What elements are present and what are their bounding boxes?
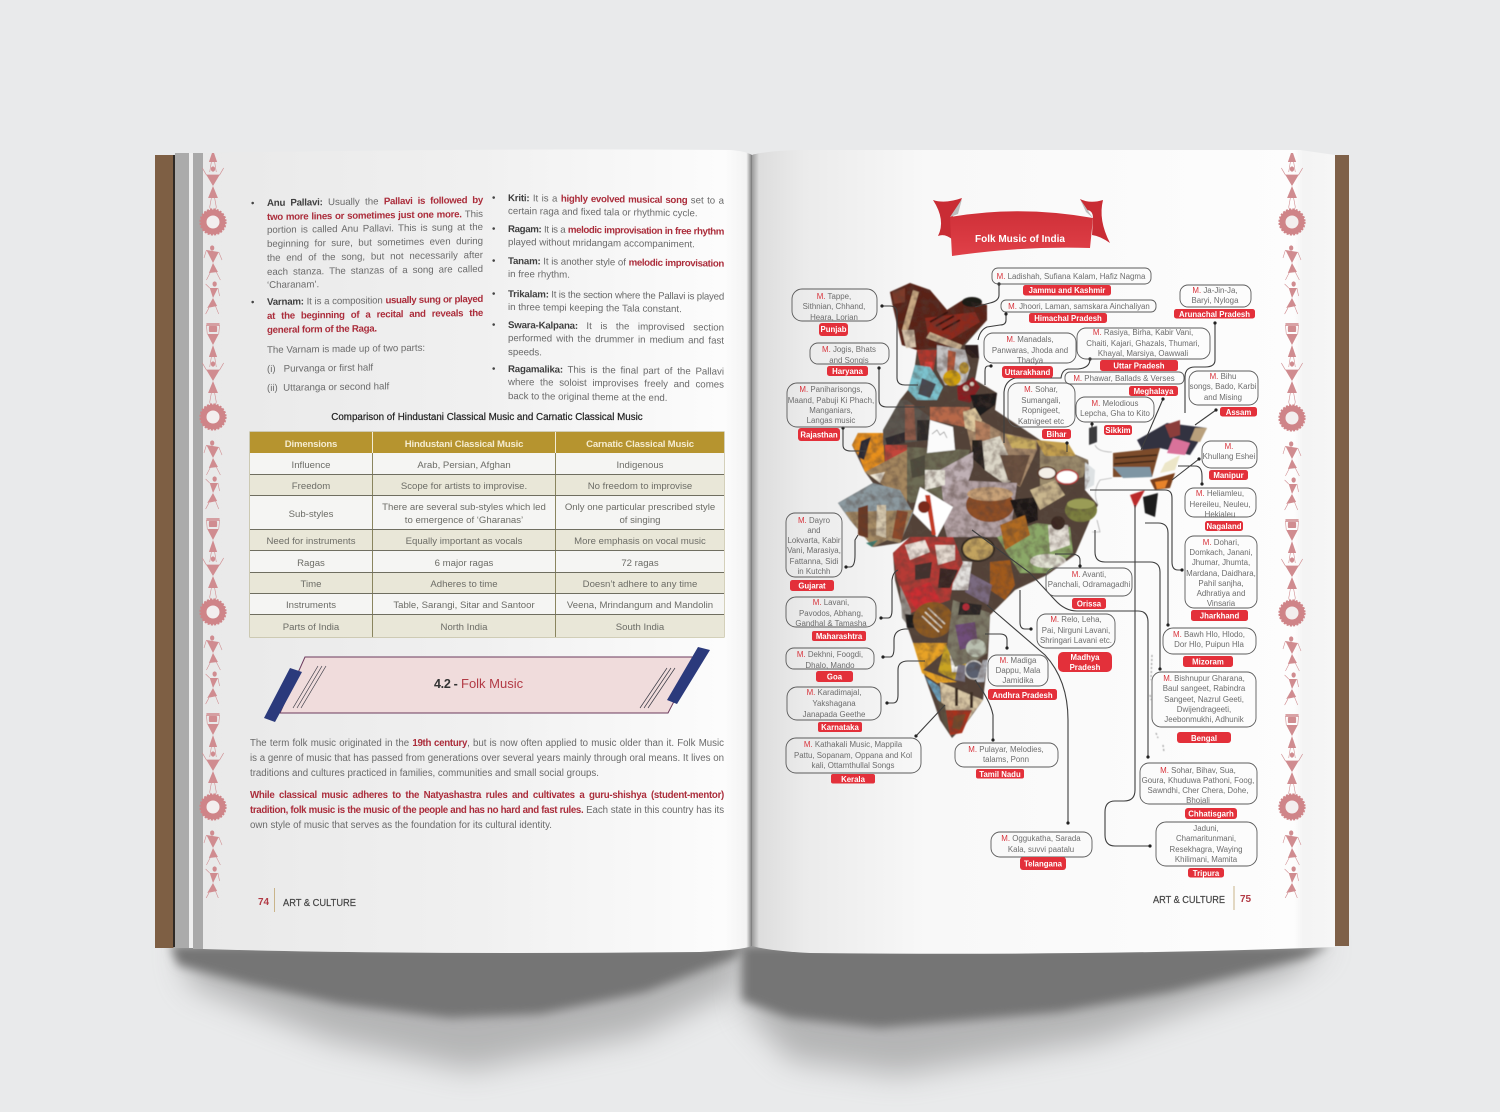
state label: Goa: M. Dekhni, Foogdi, [797,650,863,659]
state label: Nagaland: Hekialeu [1205,510,1235,519]
row: Sub-styles: to emergence of ‘Gharanas’ [405,515,523,526]
state label: Madhya Pradesh: M. Relo, Leha, [1050,615,1102,624]
state label: Bengal [1152,672,1256,743]
state label: Haryana: Haryana [832,367,864,376]
map: gujarat [838,483,913,547]
state label: Uttarakhand: Thadya [1017,356,1044,365]
state label: Haryana: and Songis [829,356,869,365]
section banner: 4.2 Folk Music [264,647,710,722]
map: tamil nadu [940,682,983,735]
row: Sub-styles [250,496,724,530]
state label: Telangana: M. Oggukatha, Sarada [1001,834,1081,843]
state label: Himachal Pradesh: Himachal Pradesh [1034,314,1102,323]
bullet: Tanam: in free rhythm. [508,269,570,281]
state label: Kerala: M. Kathakali Music, Mappila [804,740,903,749]
state label: Nagaland [1185,488,1256,531]
bullet: Anu Pallavi [251,194,484,291]
state label: Tripura: Chamaritunmani, [1176,834,1236,843]
row: Sub-styles: Sub-styles [289,509,333,520]
state label: Meghalaya: Meghalaya [1134,387,1174,396]
row: Influence [250,453,724,475]
right column text [492,193,724,404]
map: telangana and andhra pradesh [947,600,990,682]
state label: Nagaland: Nagaland [1206,522,1242,531]
state label: Sikkim: M. Melodious [1092,399,1139,408]
right footer: ART & CULTURE [1153,895,1225,906]
state label: Kerala: Kerala [841,775,866,784]
state label: Nagaland: M. Heliamleu, [1196,489,1244,498]
map: base silhouette [838,283,1098,738]
state label: Jharkhand: Pahil sanjha, [1198,579,1244,588]
row: Ragas: 72 ragas [621,558,659,569]
left footer: 74 [258,897,270,908]
state label: Bengal: Jeebonmukhi, Adhunik [1164,715,1244,724]
row: Instruments: Instruments [286,600,336,611]
bullet: Tanam: Tanam: It is another style of melodic improvisation [508,256,724,269]
map: himachal pradesh [965,345,979,358]
state label: Sikkim: Lepcha, Gha to Kito [1080,409,1150,418]
row: Influence: Influence [292,460,330,471]
state label: Uttarakhand: Panwaras, Jhoda and [992,346,1068,355]
row: Need for instruments: Equally important as vocals [406,536,522,547]
bullet: Anu Pallavi: portion is called Anu Pallavi. This is sung at the [267,222,483,236]
folk music paragraph one [250,738,724,779]
map: kerala [925,677,950,735]
state label: Gujarat: Gujarat [798,582,826,590]
state label: Maharashtra: Gandhal & Tamasha [795,619,867,628]
row: Time: Time [301,579,321,590]
state label: Gujarat: Fattanna, Sidi [790,557,839,566]
bullet: Varnam: at the beginning of a recital and reveals the [267,308,483,322]
state label: Rajasthan: Manganiars, [809,406,853,415]
state label: Punjab: Punjab [820,325,847,334]
table title: Comparison of Hindustani Classical Music and Carnatic Classical Music [331,412,643,422]
map: maharashtra [893,537,963,628]
state label: Kerala: Pattu, Sopanam, Oppana and Kol [794,751,912,760]
state label: Telangana: Telangana [1024,860,1063,868]
state label: Rajasthan: Maand, Pabuji Ki Phach, [788,396,874,405]
row: Instruments: Table, Sarangi, Sitar and Santoor [393,600,535,611]
left cover edge [155,155,174,948]
state label: Gujarat: and [807,526,821,535]
state label: Tripura: Resekhagra, Waying [1170,845,1242,854]
state label: Tripura: Jaduni, [1193,824,1219,833]
folk music paragraph one: is a genre of music that has passed from generations over several years mainly through oral means. It lives on [250,753,724,764]
left footer [258,888,356,912]
bullet: Swara-Kalpana: Swara-Kalpana: It is the improvised section [508,320,724,333]
state label: Jharkhand: Jharkhand [1200,612,1239,620]
folk music paragraph two: own style of music that serves as the foundation for its cultural identity. [250,820,552,830]
state label: Uttar Pradesh [1077,328,1210,371]
state label: Manipur [1202,441,1257,480]
state label: Jharkhand: Domkach, Janani, [1189,548,1253,557]
right warli border [1278,153,1306,898]
section banner: 4.2 Folk Music: Folk Music [461,676,524,691]
row: Ragas: Ragas [297,558,325,569]
state label: Bihar: Ropnigeet, [1022,406,1060,415]
state label: Haryana [810,343,889,376]
state label: Jharkhand: M. Dohari, [1203,538,1239,547]
table header: Dimensions [285,439,337,450]
text: • [251,297,254,308]
map: photo texture overlay [830,280,1100,740]
text: • [492,224,495,235]
state label: Punjab [792,289,877,336]
open book illustration [155,150,1349,1088]
map: uttar pradesh [930,393,1037,487]
bullet: Tanam [492,256,724,281]
row: Need for instruments [250,530,724,551]
map: chhattisgarh and orissa [950,497,1073,605]
state label: Orissa [1046,568,1132,609]
state label: Tamil Nadu [955,743,1058,779]
state label: Mizoram: Dor Hlo, Puipun Hla [1174,640,1244,649]
varnam parts: (ii) Uttaranga or second half [267,381,389,394]
map: central collage [865,445,973,513]
bullet: Varnam: general form of the Raga. [267,323,377,335]
bullet: Kriti [492,193,724,220]
map: punjab [917,350,937,375]
state label: Himachal Pradesh [1001,300,1156,323]
comparison table [250,432,724,637]
state label: Tamil Nadu: talams, Ponn [983,755,1029,764]
text: • [492,364,495,375]
left column text [251,194,484,394]
folk music paragraph two [250,790,724,830]
row: Parts of India: South India [616,622,664,633]
row: Need for instruments: More emphasis on vocal music [574,536,706,547]
left footer: ART & CULTURE [283,898,356,909]
bullet: Trikalam: in three tempi keeping the Tala constant. [508,302,682,315]
bullet: Swara-Kalpana: speeds. [508,347,542,358]
state label: Tripura: Tripura [1193,869,1220,878]
state label: Bengal: Dwijendrageeti, [1177,705,1231,714]
varnam parts: The Varnam is made up of two parts: [267,342,425,355]
row: Parts of India: North India [441,622,487,633]
state label: Uttar Pradesh: Uttar Pradesh [1113,362,1165,370]
state label: Tripura [1156,822,1257,878]
state label: Gujarat: Lokvarta, Kabir [787,536,841,545]
state label: Arunachal Pradesh [1174,285,1255,319]
map: bengal [1030,440,1095,510]
state label: Bengal: Bengal [1191,734,1217,743]
India map collage [830,280,1207,752]
state label: Assam: songs, Bado, Karbi [1190,382,1257,391]
state label: Orissa: Orissa [1077,600,1102,608]
left page [203,149,752,953]
state label: Sikkim [1076,397,1154,435]
state label: Andhra Pradesh: Jamidika [1002,676,1034,685]
state label: Bihar [1008,383,1075,439]
state label: Assam: M. Bihu [1210,372,1236,381]
row: Ragas: 6 major ragas [435,558,493,569]
state label: Punjab: M. Tappe, [817,292,851,301]
map: thin state outlines [1092,445,1112,532]
bullet: Trikalam: Trikalam: It is the section where the Pallavi is played [508,289,724,302]
folk music paragraph two: While classical music adheres to the Natyashastra rules and cultivates a guru-shishya (student-mentor) [250,790,724,800]
state label: Rajasthan [787,383,876,441]
state label: Assam: Assam [1226,408,1251,417]
left page shadow [170,945,748,1070]
state label: Bengal: Baul sangeet, Rabindra [1163,684,1246,693]
state label: Goa: Dhalo, Mando [805,661,855,670]
text: • [492,320,495,331]
state label: Madhya Pradesh: Pradesh [1070,663,1101,672]
row: Influence: Arab, Persian, Afghan [417,460,511,471]
state label: Orissa: Panchali, Odramagadhi [1048,580,1130,589]
bullet: Kriti: Kriti: It is a highly evolved musical song set to a [508,193,724,207]
bullet: Ragamalika: back to the original theme at the end. [508,391,667,404]
state label: Rajasthan: Langas music [807,416,855,425]
state label: Mizoram: M. Bawh Hlo, Hlodo, [1173,630,1245,639]
state label: Andhra Pradesh: Andhra Pradesh [992,691,1053,700]
state label: Andhra Pradesh: Dappu, Mala [996,666,1041,675]
state label: Karnataka: M. Karadimajal, [807,688,861,697]
state label: Uttarakhand: Uttarakhand [1005,368,1050,377]
state label: Chhatisgarh: Sawndhi, Cher Chera, Dohe, [1148,786,1248,795]
state label: Telangana: Kala, suvvi paatalu [1008,845,1074,854]
state label: Chhatisgarh [1140,763,1257,819]
ribbon title: Folk Music of India: Folk Music of India [975,234,1065,245]
bullet: Ragam [492,224,724,251]
state label: Gujarat: M. Dayro [798,516,831,525]
varnam parts [267,342,425,394]
state label: Madhya Pradesh: Shringari Lavani etc. [1040,636,1112,645]
state label: Telangana [991,832,1092,870]
state label: Goa: Goa [827,672,843,682]
state label: Gujarat: Vani, Marasiya, [787,546,841,555]
text: • [492,289,495,300]
right page shadow [742,945,1330,1075]
state label: Himachal Pradesh: M. Jhoori, Laman, samskara Ainchaliyan [1008,302,1150,311]
state label: Maharashtra: Pavodos, Abhang, [799,609,863,618]
state label: Haryana: M. Jogis, Bhats [822,345,876,354]
varnam parts: (i) Purvanga or first half [267,362,373,375]
row: Instruments: Veena, Mrindangum and Mandolin [567,600,713,611]
state label: Mizoram [1163,628,1256,667]
state label: Assam [1189,371,1258,417]
map: goa and karnataka [913,602,968,683]
state label: Manipur: Khullang Eshei [1203,452,1256,461]
state label: Uttar Pradesh: M. Rasiya, Birha, Kabir Vani, [1093,328,1193,337]
row: Parts of India [250,615,724,637]
state label: Madhya Pradesh: Pai, Nirguni Lavani, [1042,626,1110,635]
bullet: Anu Pallavi: ‘Charanam’. [267,279,319,291]
row: Need for instruments: Need for instruments [266,536,356,547]
state label: Bihar: Bihar [1047,430,1066,439]
state label: Jharkhand [1185,536,1257,621]
state label: Bengal: Sangeet, Nazrul Geeti, [1164,695,1244,704]
bullet: Ragamalika: Ragamalika: This is the final part of the Pallavi [508,364,724,377]
bullet: Trikalam [492,289,724,315]
left spine strips [173,153,204,949]
map: jammu and kashmir [890,283,987,350]
state label: Chhatisgarh: Goura, Khuduwa Pathoni, Foog, [1142,776,1254,785]
state label: Kerala: kali, Ottamthullal Songs [812,761,894,770]
row: Parts of India: Parts of India [283,622,339,633]
state label: Punjab: Sithnian, Chhand, [803,302,865,311]
state label: Karnataka [787,687,881,732]
row: Sub-styles: Only one particular prescribed style [565,502,715,513]
map: rajasthan [852,400,930,472]
state label: Jammu and Kashmir: M. Ladishah, Sufiana Kalam, Hafiz Nagma [997,272,1146,281]
state label: Mizoram: Mizoram [1192,658,1224,666]
state label: Rajasthan: M. Paniharisongs, [799,385,863,394]
state label: Kerala [786,738,921,784]
state label: Karnataka: Yakshagana [812,699,856,708]
bullet: Anu Pallavi: Anu Pallavi: Usually the Pallavi is followed by [267,194,483,208]
state label: Bihar: Katnigeet etc [1018,417,1064,426]
map: madhya pradesh [940,480,1017,537]
text: • [492,193,495,204]
connector lines [841,282,1218,848]
table header [250,432,724,453]
row: Instruments [250,594,724,615]
section banner: 4.2 Folk Music: 4.2 - [434,677,458,691]
state label: Bihar: Sumangali, [1021,396,1061,405]
bullet: Varnam: Varnam: It is a composition usually sung or played [267,294,483,308]
state label: Punjab: Heara, Lorian [810,313,858,322]
state label: Gujarat [786,513,842,591]
folk music paragraph one: The term folk music originated in the 19th century, but is now often applied to music older than it. Folk Music [250,738,724,749]
bullet: Ragamalika: where the soloist improvises freely and comes [508,377,724,391]
bullet: Swara-Kalpana: performed with the drummer in medium and fast [508,333,724,347]
row: Sub-styles: of singing [619,515,661,526]
bullet: Swara-Kalpana [492,320,724,358]
right footer: 75 [1240,894,1252,905]
state label: Sikkim: Sikkim [1105,426,1131,435]
state label: Uttar Pradesh: Khayal, Marsiya, Oawwali [1098,349,1188,358]
state label: Jharkhand: Mardana, Daidhara, [1186,569,1256,578]
state label: Tamil Nadu: Tamil Nadu [979,770,1021,779]
table header: Hindustani Classical Music [405,439,523,450]
map: assam and north east [1113,420,1207,517]
state label: Manipur: Manipur [1213,471,1244,480]
state label: Meghalaya [1065,372,1184,396]
state label: Arunachal Pradesh: Baryi, Nyloga [1192,296,1239,305]
state label: Assam: and Mising [1204,393,1242,402]
bullet: Varnam [251,294,483,335]
state label: Tamil Nadu: M. Pulayar, Melodies, [968,745,1044,754]
bullet: Anu Pallavi: each stanza. The stanzas of a song are called [267,263,483,277]
state label: Uttarakhand: M. Manadals, [1006,335,1054,344]
state label: Maharashtra [786,597,876,641]
state label: Bihar: M. Sohar, [1024,385,1058,394]
state label: Rajasthan: Rajasthan [800,430,838,440]
state label: Madhya Pradesh: Madhya [1070,653,1100,662]
left warli border [200,153,227,898]
state label: Jharkhand: Adhratiya and [1197,589,1245,598]
state label: Chhatisgarh: Chhatisgarh [1188,810,1234,818]
bullet: Anu Pallavi: two more lines or sometimes just one more. This [267,208,483,222]
text: • [492,256,495,267]
state label: Jharkhand: Vinsaria [1207,599,1236,608]
map: uttarakhand and haryana [908,345,980,403]
folk music paragraph two: tradition, folk music is the music of the people and has no hard and fast rules. Each state in this country has its [250,804,724,816]
state label: Nagaland: Hereileu, Neuleu, [1190,500,1250,509]
row: Freedom: Freedom [292,481,330,492]
state label: Jammu and Kashmir [992,268,1151,296]
state label: Meghalaya: M. Phawar, Ballads & Verses [1073,374,1175,383]
row: Freedom: No freedom to improvise [588,481,692,492]
state label: Jammu and Kashmir: Jammu and Kashmir [1029,286,1105,295]
bullet: Kriti: certain raga and fixed tala or rhythmic cycle. [508,206,698,220]
state label: Karnataka: Karnataka [821,723,860,732]
state label: Arunachal Pradesh: Arunachal Pradesh [1179,310,1250,319]
state label: Andhra Pradesh: M. Madiga [1000,656,1037,665]
row: Freedom [250,475,724,496]
row: Freedom: Scope for artists to improvise. [401,481,527,492]
state label: Maharashtra: Maharashtra [816,632,863,641]
state label: Uttar Pradesh: Chaiti, Kajari, Ghazals, Thumari, [1086,339,1200,348]
map: sikkim [1089,426,1097,445]
right page [752,150,1335,954]
row: Time [250,573,724,594]
text: • [251,198,254,209]
bullet: Anu Pallavi: the end of the song, but not necessarily after [267,249,483,263]
bullet: Ragamalika [492,364,724,404]
state label: Orissa: M. Avanti, [1072,570,1106,579]
state label: Gujarat: in Kutchh [798,567,830,576]
state label: Tripura: Khilimani, Mamita [1175,855,1238,864]
map: jharkhand [1065,498,1097,522]
row: Sub-styles: There are several sub-styles which led [382,502,546,513]
state label: Maharashtra: M. Lavani, [813,598,849,607]
right footer [1153,886,1252,910]
state label: Arunachal Pradesh: M. Ja-Jin-Ja, [1192,286,1238,295]
right cover edge [1333,155,1349,946]
row: Influence: Indigenous [617,460,663,471]
state label: Madhya Pradesh [1037,614,1115,672]
state label: Goa [786,648,874,682]
state label: Chhatisgarh: M. Sohar, Bihav, Sua, [1160,766,1236,775]
map: island marks [1150,655,1164,752]
row: Time: Adheres to time [430,579,498,590]
state label: Uttarakhand [984,333,1076,378]
row: Time: Doesn’t adhere to any time [583,579,697,590]
map: white cut-outs and drums [913,420,1095,537]
bullet: Anu Pallavi: beginning for sure, but sometimes even during [267,236,483,250]
state label: Andhra Pradesh [988,655,1057,700]
state label: Bengal: M. Bishnupur Gharana, [1163,674,1245,683]
bullet: Ragam: played without mridangam accompaniment. [508,237,695,251]
ribbon title: Folk Music of India [933,198,1110,256]
folk music paragraph one: traditions and cultures practiced in families, communities and small social groups. [250,768,599,779]
state label: Karnataka: Janapada Geethe [803,710,866,719]
state label: Jharkhand: Jhumar, Jhumta, [1192,558,1250,567]
table header: Carnatic Classical Music [586,439,694,450]
bullet: Ragam: Ragam: It is a melodic improvisation in free rhythm [508,224,724,238]
state label: Manipur: M. [1225,442,1233,451]
row: Ragas [250,551,724,573]
state label: Chhatisgarh: Bhojali [1186,796,1210,805]
